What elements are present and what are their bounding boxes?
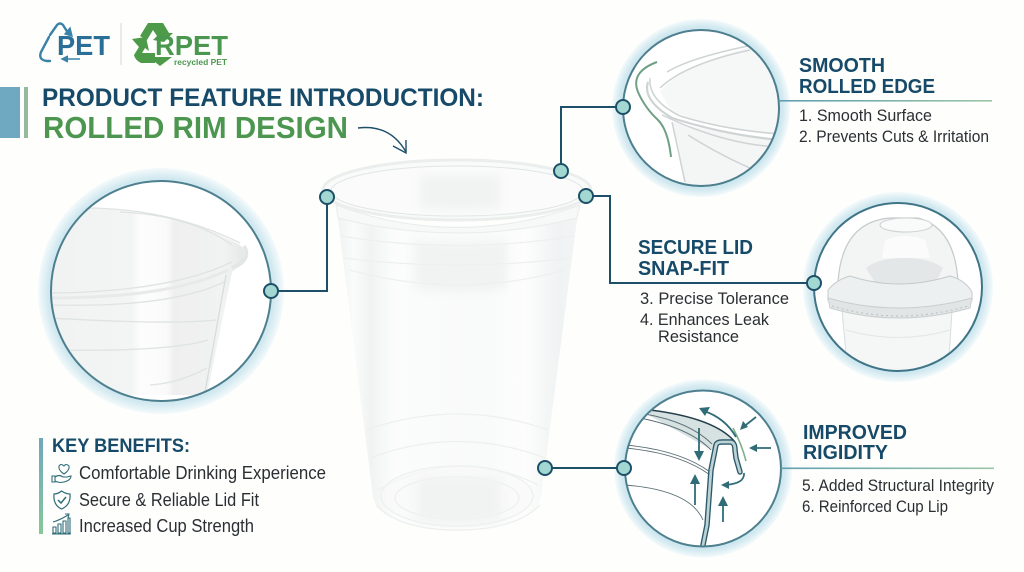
callout nodes [264, 100, 821, 475]
text block: smooth rolled edge: ROLLED EDGE [799, 76, 935, 98]
text block: smooth rolled edge [779, 55, 992, 146]
connector: rim to smooth edge [561, 107, 623, 171]
logo: RPET [120, 23, 228, 67]
text block: secure lid snap-fit: SECURE LID [638, 237, 753, 259]
heading: key benefits: KEY BENEFITS: [52, 436, 190, 457]
text block: improved rigidity: RIGIDITY [803, 442, 889, 464]
logo: PET: PET [57, 30, 110, 61]
text block: improved rigidity: 6. Reinforced Cup Lip [802, 497, 948, 516]
text block: secure lid snap-fit [638, 237, 789, 346]
panel: rigidity diagram [614, 380, 792, 558]
text block: secure lid snap-fit: SNAP-FIT [638, 258, 729, 280]
panel: left rim close-up [38, 168, 284, 414]
arrow: title to cup [358, 128, 406, 153]
central cup [323, 160, 591, 530]
text block: improved rigidity [781, 422, 994, 516]
benefit 1: Comfortable Drinking Experience [79, 463, 326, 483]
text block: improved rigidity: 5. Added Structural Integrity [802, 476, 994, 495]
panel: lid close-up [803, 192, 993, 382]
title [42, 84, 484, 145]
icon: shield [54, 491, 70, 509]
connector: cup to rigidity [545, 467, 624, 469]
logo: PET [40, 24, 110, 62]
icon: hand with heart [52, 464, 71, 482]
title: ROLLED RIM DESIGN [43, 110, 348, 145]
text block: improved rigidity: IMPROVED [803, 422, 907, 444]
benefit 2: Secure & Reliable Lid Fit [79, 490, 259, 510]
title: PRODUCT FEATURE INTRODUCTION: [42, 84, 484, 112]
logo: RPET: recycled PET [174, 58, 227, 67]
benefit 3: Increased Cup Strength [79, 516, 254, 536]
panel: smooth rolled edge close-up [612, 19, 790, 197]
text block: smooth rolled edge: 1. Smooth Surface [799, 106, 932, 125]
text block: smooth rolled edge: SMOOTH [799, 55, 885, 77]
title accent bars [0, 87, 28, 138]
logo: RPET: RPET [155, 30, 228, 61]
panel: key benefits [39, 436, 326, 536]
connector: rim to lid [586, 196, 814, 283]
connector: rim to left circle [271, 197, 327, 291]
text block: secure lid snap-fit: Resistance [658, 327, 739, 346]
text block: secure lid snap-fit: 4. Enhances Leak [640, 310, 769, 329]
text block: secure lid snap-fit: 3. Precise Tolerance [640, 289, 789, 308]
icon: rising bars [52, 514, 71, 534]
text block: smooth rolled edge: 2. Prevents Cuts & Irritation [799, 127, 989, 146]
